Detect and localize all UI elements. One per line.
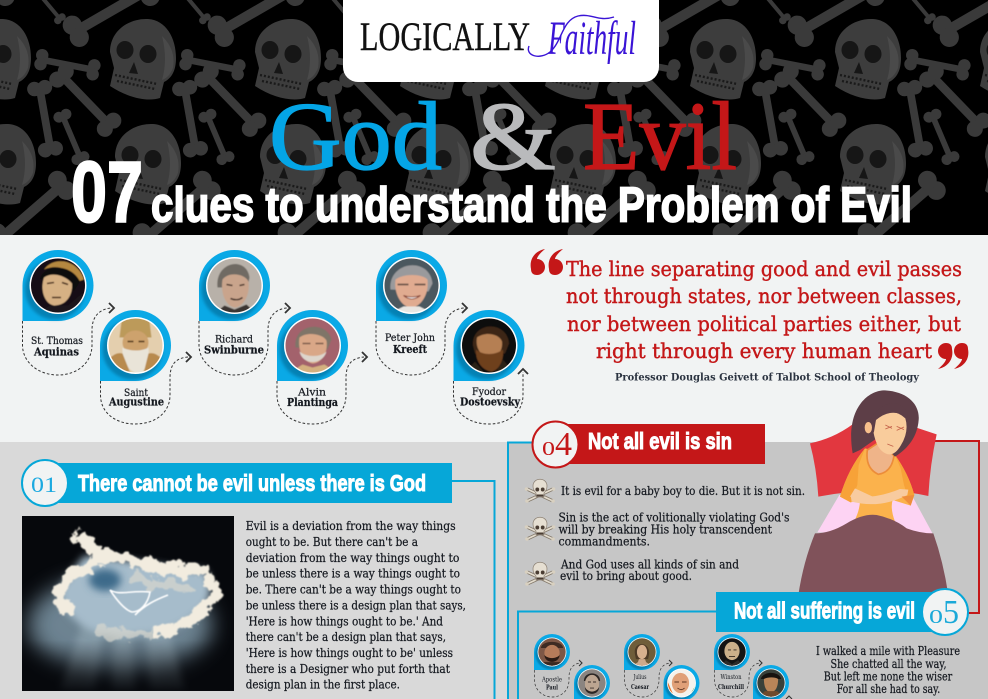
thinker: Peter John Kreeft: Kreeft [393, 343, 428, 356]
panel: right section background [508, 442, 988, 699]
body text 01: be unless there is a design plan that says, [246, 598, 466, 612]
body text 01 [246, 519, 466, 692]
thinker: Apostle Paul: Paul [546, 684, 558, 692]
section 01 [22, 460, 494, 699]
section 05 heading [716, 589, 968, 635]
thinker: Alvin Plantinga [277, 310, 367, 424]
title: God & Evil: Evil [583, 83, 737, 190]
thinker: Winston Churchill: Winston [720, 674, 742, 681]
quote: not through states, nor between classes, [566, 284, 962, 308]
quote: Professor Douglas Geivett of Talbot School of Theology [615, 372, 920, 384]
number badge 05: 0 [929, 606, 943, 628]
number badge 05 [922, 589, 968, 635]
thinker: Saint Augustine: Saint [124, 387, 149, 399]
logo: LOGICALLY [360, 14, 530, 59]
poem: She chatted all the way, [830, 657, 946, 671]
title: God & Evil [269, 83, 737, 190]
heading bar 05 [716, 592, 945, 632]
portrait: Mahatma Gandhi [664, 665, 699, 699]
body text 01: be. There can't be a way things ought to [246, 582, 461, 596]
section 04 frame lines [508, 442, 540, 699]
body text 01: there is a Designer who put forth that [246, 662, 450, 676]
thinker: Richard Swinburne [199, 250, 290, 375]
body text 01: Evil is a deviation from the way things [246, 519, 456, 533]
poem: But left me none the wiser [824, 670, 952, 684]
thinker: Julius Caesar: Julius [633, 674, 646, 681]
icon: skull bullet 1 [525, 479, 555, 503]
section 05 frame line [518, 612, 716, 699]
poem: For all she had to say. [837, 682, 940, 696]
thinker: Peter John Kreeft [376, 250, 467, 375]
body text 01: be unless there is a way things ought to [246, 567, 460, 581]
list: sin points [525, 479, 805, 586]
icon: closing quotation mark [938, 343, 968, 369]
title: God & Evil: God [269, 83, 442, 190]
section 04 heading [532, 422, 765, 468]
panel: left section background [0, 442, 508, 699]
thinker: Richard Swinburne: Richard [215, 334, 253, 346]
thinker: Saint Augustine: Augustine [108, 396, 164, 409]
thinker: St. Thomas Aquinas: St. Thomas [31, 335, 83, 347]
list: sin points: It is evil for a baby boy to die. But it is not sin. [561, 484, 805, 498]
number badge 01 [22, 460, 68, 506]
icon: opening quotation mark [531, 249, 563, 275]
thinker: Winston Churchill [714, 634, 762, 697]
thinker: St. Thomas Aquinas [22, 250, 114, 375]
heading 04 text: Not all evil is sin [588, 428, 732, 454]
thinker: Winston Churchill: Churchill [718, 683, 744, 691]
logo: Faithful [547, 12, 636, 65]
thinker: Alvin Plantinga: Alvin [297, 387, 326, 399]
body text 01: ought to be. But there can't be a [246, 535, 418, 549]
thinker: Peter John Kreeft: Peter John [385, 332, 435, 344]
thinker: Apostle Paul [534, 634, 582, 697]
portrait: Renaissance figure [753, 665, 792, 699]
body text 01: there can't be a design plan that says, [246, 630, 446, 644]
heading bar 01 [45, 463, 452, 503]
number badge 05: 5 [943, 594, 959, 631]
body text 01: 'Here is how things ought to be' unless [246, 646, 453, 660]
number badge 01: 01 [31, 472, 57, 497]
body text 01: deviation from the way things ought to [246, 551, 459, 565]
number badge 04: 4 [555, 426, 572, 463]
heading 01 text: There cannot be evil unless there is God [78, 470, 426, 496]
subtitle: 07 clues: 07 [71, 144, 143, 240]
title: God & Evil: & [470, 83, 556, 190]
heading bar 04 [556, 424, 765, 464]
thinker row: examples of suffering [534, 634, 792, 699]
subtitle: 07 clues [71, 144, 912, 240]
thinker: St. Thomas Aquinas: Aquinas [33, 346, 79, 358]
quote: nor between political parties either, but [567, 312, 962, 336]
body text 01: design plan in the first place. [246, 678, 400, 692]
quote [531, 249, 968, 384]
photo: light breaking through dark clouds [22, 516, 234, 691]
thinker: Apostle Paul: Apostle [541, 677, 562, 684]
list: sin points: And God uses all kinds of sin and [560, 558, 739, 572]
skull and bones pattern [0, 0, 988, 256]
body text 01: 'Here is how things ought to be.' And [246, 614, 443, 628]
number badge 04 [532, 422, 578, 468]
thinker: Alvin Plantinga: Plantinga [287, 396, 338, 409]
thinker: Saint Augustine [100, 310, 191, 424]
quote: right through every human heart [596, 339, 933, 363]
thinker: Fyodor Dostoevsky [454, 310, 528, 424]
panel: thinkers and quote background [0, 235, 988, 442]
illustration: sick woman in bed [798, 390, 948, 595]
icon: skull bullet 3 [525, 562, 555, 586]
list: sin points: evil to bring about good. [560, 569, 692, 583]
thinker: Julius Caesar [624, 634, 672, 697]
list: sin points: commandments. [558, 535, 650, 549]
list: sin points: Sin is the act of volitionally violating God's [558, 511, 790, 525]
list: sin points: will by breaking His holy transcendent [558, 523, 772, 537]
red frame line [930, 441, 979, 613]
thinker: Julius Caesar: Caesar [631, 683, 649, 691]
panel: hero header background [0, 0, 988, 256]
logo [343, 0, 659, 82]
number badge 04: 0 [542, 438, 555, 460]
heading 05 text: Not all suffering is evil [734, 598, 915, 624]
portrait: Abraham Lincoln [574, 665, 610, 699]
thinker: Richard Swinburne: Swinburne [204, 344, 264, 357]
poem [816, 644, 960, 696]
icon: skull bullet 2 [525, 517, 555, 541]
thinker: Fyodor Dostoevsky: Fyodor [472, 386, 507, 398]
quote: The line separating good and evil passes [566, 257, 962, 281]
thinker: Fyodor Dostoevsky: Dostoevsky [460, 396, 521, 409]
